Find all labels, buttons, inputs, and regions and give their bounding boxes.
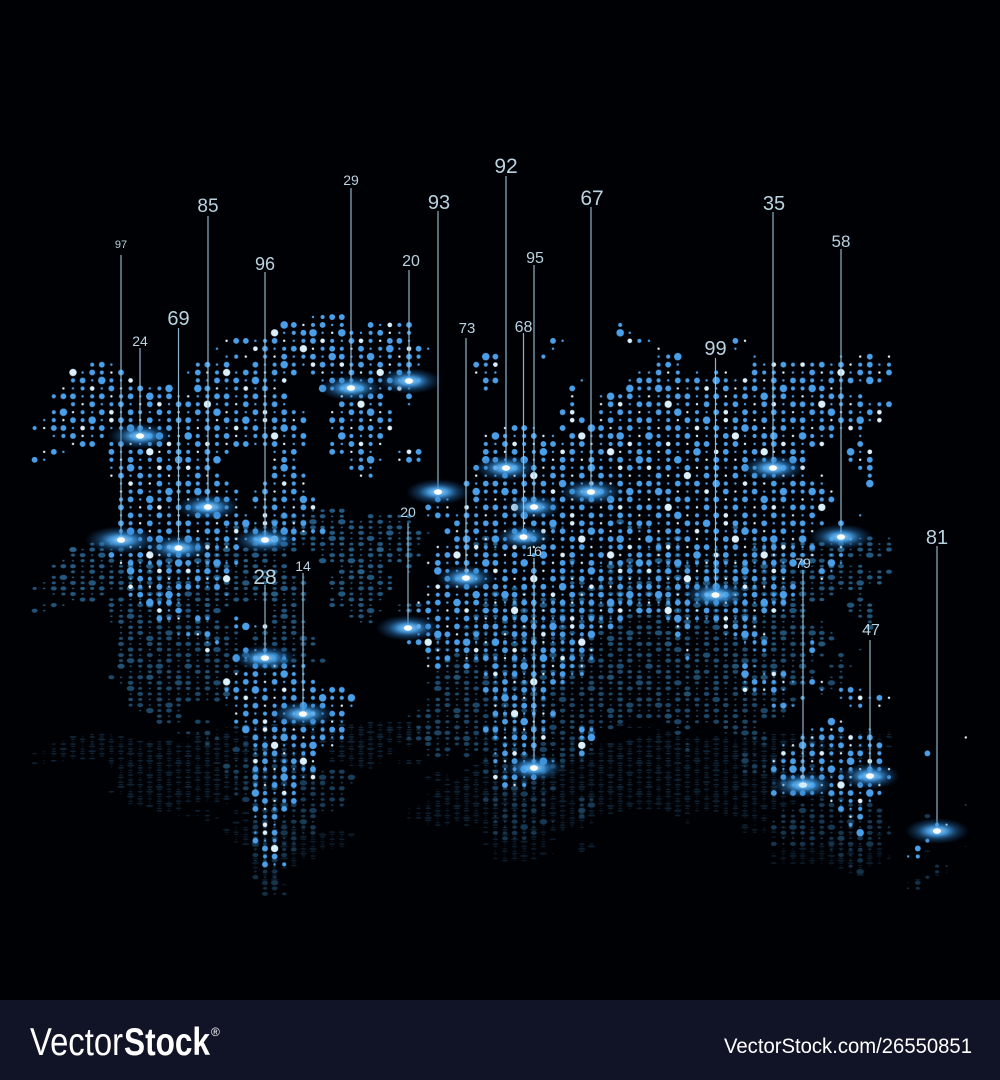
marker 79 <box>771 555 835 798</box>
marker 28 <box>233 566 297 671</box>
marker 95 <box>506 250 562 519</box>
marker 67 <box>559 187 623 505</box>
marker 20 west Africa: 20 <box>400 504 416 520</box>
dotted world map <box>31 314 968 868</box>
marker 97 <box>85 239 157 554</box>
near reflection of map <box>31 508 967 896</box>
marker 73: 73 <box>459 320 475 337</box>
marker 92: 92 <box>494 155 518 178</box>
marker 20 north: 20 <box>402 253 420 270</box>
marker 28: 28 <box>253 566 277 589</box>
marker 81 <box>905 527 969 844</box>
marker 96 <box>233 254 297 553</box>
marker 95: 95 <box>526 250 544 267</box>
marker 81: 81 <box>926 527 948 549</box>
footer url: VectorStock.com/26550851 <box>724 1035 972 1058</box>
marker 99: 99 <box>704 338 727 360</box>
marker 85: 85 <box>197 196 219 217</box>
marker 35: 35 <box>763 193 785 215</box>
marker 96: 96 <box>255 254 275 274</box>
marker 69 <box>146 308 210 561</box>
reflection fade <box>0 560 1000 905</box>
marker 47: 47 <box>862 622 880 639</box>
footer logo <box>30 1021 220 1064</box>
marker 29 <box>319 172 383 401</box>
marker 93 <box>406 192 470 505</box>
marker 16: 16 <box>526 543 542 559</box>
marker 68 <box>496 319 552 549</box>
marker 29: 29 <box>343 172 359 188</box>
footer logo: ® <box>211 1025 220 1039</box>
marker 35 <box>741 193 805 481</box>
footer bar <box>0 1000 1000 1080</box>
marker 24 <box>108 333 172 449</box>
marker 47 <box>840 622 900 789</box>
marker 73 <box>436 320 496 591</box>
marker 99 <box>684 338 748 608</box>
marker 79: 79 <box>795 555 811 571</box>
marker 92 <box>474 155 538 481</box>
marker 24: 24 <box>132 333 148 349</box>
footer logo: Stock <box>124 1021 210 1064</box>
marker 14: 14 <box>295 558 311 574</box>
marker 93: 93 <box>428 192 450 214</box>
marker 58: 58 <box>832 232 850 251</box>
marker 14 <box>271 558 335 727</box>
marker 67: 67 <box>580 187 604 210</box>
marker 97: 97 <box>115 239 127 251</box>
marker 58 <box>809 232 873 550</box>
marker 69: 69 <box>167 308 190 330</box>
marker 16 <box>504 543 564 781</box>
marker 20 west Africa <box>376 504 440 641</box>
marker 85 <box>176 196 240 520</box>
marker 68: 68 <box>515 319 532 336</box>
footer logo: Vector <box>30 1021 123 1064</box>
far reflection of map <box>32 720 967 886</box>
marker 20 north <box>377 253 441 394</box>
